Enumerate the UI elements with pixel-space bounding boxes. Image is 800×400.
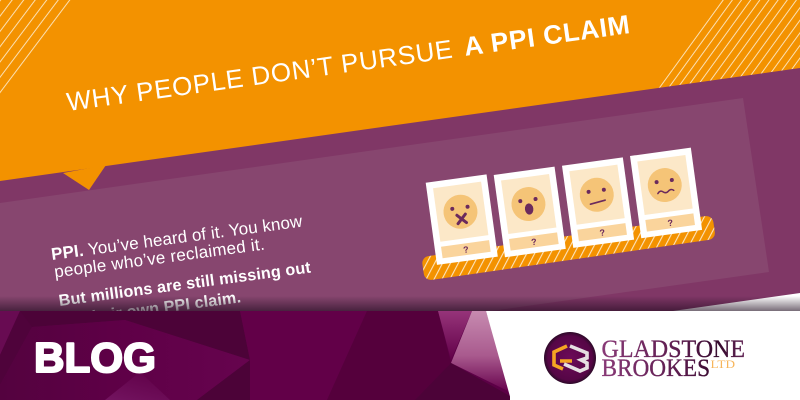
card: lips crossed face: ?	[463, 244, 469, 255]
intro text block	[50, 212, 312, 330]
hatched orange tray	[421, 215, 716, 281]
BLOG heading: BLOG	[34, 334, 156, 381]
intro text block: But millions are still missing out	[58, 258, 312, 310]
panel: purple content sheet	[0, 68, 800, 311]
logo: Gladstone Brookes: GLADSTONE	[602, 334, 745, 363]
card: lips crossed face	[426, 174, 498, 265]
panel: lighter inner card	[0, 98, 769, 380]
card: flat mouth face: ?	[599, 227, 606, 238]
logo: Gladstone Brookes	[544, 332, 745, 384]
card: wavy mouth face: ?	[667, 218, 674, 228]
title: WHY PEOPLE DON’T PURSUE	[65, 34, 454, 117]
speech bubble pointer	[63, 165, 106, 190]
intro text block: PPI. You’ve heard of it. You know	[50, 212, 304, 264]
shadow above footer band	[0, 296, 800, 311]
logo: Gladstone Brookes: BROOKES	[602, 353, 710, 382]
white paper strip behind content	[600, 280, 800, 311]
hatching: top left corner	[0, 0, 77, 100]
intro text block: on their own PPI claim.	[61, 288, 242, 330]
card: flat mouth face	[562, 157, 634, 248]
card: wavy mouth face	[630, 148, 702, 238]
title	[65, 9, 631, 117]
card: shocked face: ?	[531, 237, 537, 247]
card: shocked face	[494, 167, 566, 257]
logo: Gladstone Brookes: LTD	[710, 357, 735, 371]
title: A PPI CLAIM	[462, 9, 631, 62]
orange header background	[0, 0, 800, 200]
footer: dark faceted band	[0, 311, 510, 400]
hatching: top right corner	[658, 0, 800, 88]
intro text block: people who’ve reclaimed it.	[53, 235, 266, 281]
footer: white logo area	[486, 311, 800, 400]
